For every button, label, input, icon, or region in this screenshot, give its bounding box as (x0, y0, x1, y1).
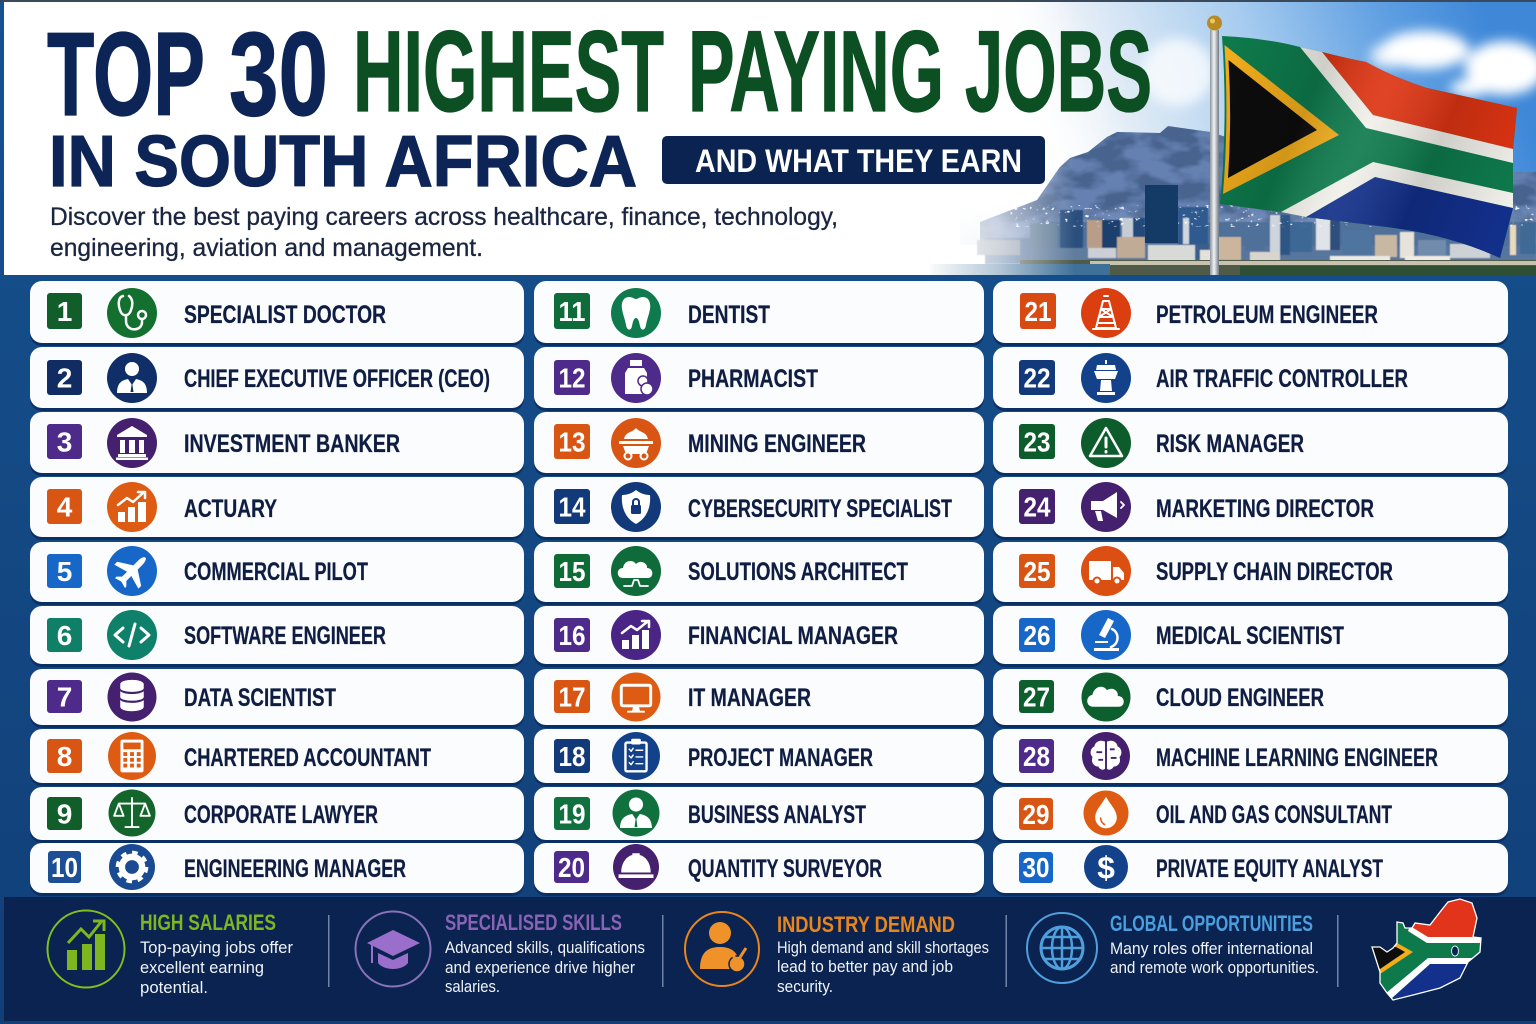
icon: finance chart (611, 610, 661, 660)
icon: hard hat (613, 844, 659, 890)
icon: medicine bottle (611, 353, 661, 403)
badge 25: 25 (1024, 556, 1050, 587)
description (777, 938, 989, 996)
badge 6 (47, 618, 82, 652)
row 26 (993, 606, 1508, 667)
badge 12: 12 (558, 362, 586, 394)
badge 16: 16 (558, 620, 586, 651)
footer band (4, 895, 1536, 1021)
badge 30: 30 (1022, 852, 1050, 883)
row 22 (993, 347, 1508, 411)
badge 8: 8 (57, 741, 72, 772)
row 18 (534, 729, 984, 786)
label: OIL AND GAS CONSULTANT (1156, 801, 1392, 829)
icon: growth chart (107, 482, 157, 532)
benefit: global opportunities (1027, 911, 1319, 983)
benefit: specialised skills (356, 910, 645, 996)
heading: SPECIALISED SKILLS (445, 910, 622, 935)
badge 24: 24 (1024, 492, 1051, 522)
label: MINING ENGINEER (688, 430, 866, 458)
row 30 (993, 843, 1508, 896)
icon: scales (108, 790, 156, 836)
heading: INDUSTRY DEMAND (777, 912, 955, 937)
badge 2: 2 (57, 362, 72, 394)
badge 27: 27 (1023, 682, 1050, 712)
label: PHARMACIST (688, 365, 818, 393)
benefit: industry demand (685, 912, 989, 996)
badge 18: 18 (558, 741, 586, 772)
title: HIGHEST PAYING JOBS: PAYING (688, 8, 944, 136)
label: PRIVATE EQUITY ANALYST (1156, 855, 1383, 883)
title: HIGHEST PAYING JOBS (353, 8, 1152, 136)
row 14 (534, 477, 984, 540)
icon: airplane (107, 546, 157, 596)
row 3 (30, 412, 524, 476)
badge 5: 5 (57, 556, 72, 587)
badge 1 (47, 293, 82, 329)
description: Top-paying jobs offer (140, 938, 293, 957)
flag pole (1207, 16, 1222, 275)
label: QUANTITY SURVEYOR (688, 855, 882, 883)
icon: dollar (1084, 845, 1128, 889)
badge 15: 15 (558, 556, 586, 587)
row 8 (30, 729, 524, 786)
row 19 (534, 787, 984, 843)
badge 9: 9 (57, 798, 72, 830)
label: PETROLEUM ENGINEER (1156, 301, 1378, 329)
description: security. (777, 977, 833, 996)
icon: calculator (108, 732, 156, 780)
badge 21: 21 (1024, 296, 1052, 327)
intro text (50, 203, 838, 262)
badge 1: 1 (57, 296, 72, 327)
row 4 (30, 477, 524, 540)
benefit: high salaries (48, 910, 293, 997)
row 17 (534, 669, 984, 728)
header banner (4, 2, 1536, 275)
South African flag (1220, 36, 1517, 258)
row 21 (993, 281, 1508, 346)
job list: column 2 (534, 281, 984, 896)
badge 20: 20 (558, 852, 585, 883)
icon: business person (612, 790, 660, 836)
badge 28: 28 (1023, 741, 1050, 772)
label: DENTIST (688, 301, 770, 329)
label: SOFTWARE ENGINEER (184, 622, 386, 650)
badge 7 (47, 680, 82, 713)
icon: oil rig (1081, 288, 1131, 338)
icon: control tower (1081, 353, 1131, 403)
icon: shield lock (611, 482, 661, 532)
row 11 (534, 281, 984, 346)
badge 9 (47, 797, 82, 830)
icon: delivery truck (1081, 546, 1131, 596)
label: PROJECT MANAGER (688, 744, 873, 772)
icon: graduation cap (356, 912, 430, 986)
badge 4 (47, 489, 82, 524)
icon: microscope (1081, 610, 1131, 660)
row 1 (30, 281, 524, 346)
intro text: Discover the best paying careers across healthcare, finance, technology, (50, 203, 838, 231)
label: AIR TRAFFIC CONTROLLER (1156, 365, 1408, 393)
icon: database (108, 672, 156, 722)
label: MARKETING DIRECTOR (1156, 495, 1374, 523)
title: HIGHEST PAYING JOBS: JOBS (965, 8, 1152, 136)
badge 26: 26 (1024, 620, 1050, 651)
badge 29: 29 (1022, 799, 1050, 830)
Table Mountain (980, 126, 1536, 250)
row 15 (534, 542, 984, 605)
row 27 (993, 669, 1508, 728)
description: Advanced skills, qualifications (445, 938, 645, 957)
label: CHIEF EXECUTIVE OFFICER (CEO) (184, 365, 490, 393)
description: and remote work opportunities. (1110, 958, 1319, 977)
badge 11: 11 (558, 296, 586, 327)
subtitle pill (662, 136, 1045, 184)
intro text: engineering, aviation and management. (50, 234, 483, 262)
icon: mine cart (611, 418, 661, 468)
title line 1 (47, 8, 1152, 141)
row 23 (993, 412, 1508, 476)
description: excellent earning (140, 958, 264, 977)
label: SOLUTIONS ARCHITECT (688, 558, 908, 586)
icon: warning (1081, 418, 1131, 468)
row 29 (993, 787, 1508, 843)
title line 2: IN SOUTH AFRICA: IN SOUTH AFRICA (49, 122, 637, 202)
badge 13: 13 (558, 426, 586, 458)
label: FINANCIAL MANAGER (688, 622, 898, 650)
row 12 (534, 347, 984, 411)
label: SPECIALIST DOCTOR (184, 301, 386, 329)
icon: clipboard (612, 732, 660, 780)
title: TOP 30: TOP (47, 8, 205, 141)
badge 3 (47, 424, 82, 459)
icon: bank (107, 418, 157, 468)
job list: column 3 (993, 281, 1508, 896)
icon: brain (1082, 732, 1130, 780)
label: DATA SCIENTIST (184, 684, 336, 712)
description: and experience drive higher (445, 958, 635, 977)
icon: worker with tools (685, 912, 759, 986)
badge 3: 3 (57, 426, 72, 458)
row 6 (30, 606, 524, 667)
badge 6: 6 (57, 620, 72, 651)
description (140, 938, 293, 997)
row 28 (993, 729, 1508, 786)
row 10 (30, 843, 524, 896)
label: SUPPLY CHAIN DIRECTOR (1156, 558, 1393, 586)
badge 5 (47, 554, 82, 588)
description: Many roles offer international (1110, 939, 1313, 958)
label: ACTUARY (184, 495, 277, 523)
badge 22: 22 (1024, 362, 1050, 394)
skyline photo: sky, Table Mountain and city (925, 2, 1536, 275)
icon: rising bars (48, 910, 124, 988)
row 13 (534, 412, 984, 476)
description (445, 938, 645, 996)
heading: GLOBAL OPPORTUNITIES (1110, 911, 1313, 936)
row 7 (30, 669, 524, 728)
row 2 (30, 347, 524, 411)
label: IT MANAGER (688, 684, 811, 712)
label: MACHINE LEARNING ENGINEER (1156, 744, 1438, 772)
label: COMMERCIAL PILOT (184, 558, 368, 586)
label: CORPORATE LAWYER (184, 801, 378, 829)
title: HIGHEST PAYING JOBS: HIGHEST (353, 8, 664, 136)
badge 2 (47, 360, 82, 395)
label: RISK MANAGER (1156, 430, 1304, 458)
description: High demand and skill shortages (777, 938, 989, 957)
description: potential. (140, 978, 208, 997)
icon: tooth (611, 288, 661, 338)
icon: gear (109, 844, 155, 890)
job list: column 1 (30, 281, 524, 896)
badge 19: 19 (558, 798, 586, 830)
icon: cloud network (611, 546, 661, 596)
label: MEDICAL SCIENTIST (1156, 622, 1344, 650)
badge 7: 7 (57, 682, 72, 712)
row 20 (534, 843, 984, 896)
title: TOP 30: 30 (229, 8, 328, 141)
label: CHARTERED ACCOUNTANT (184, 744, 431, 772)
badge 14: 14 (558, 492, 586, 522)
row 16 (534, 606, 984, 667)
description (1110, 939, 1319, 977)
icon: code (107, 610, 157, 660)
icon: executive (107, 353, 157, 403)
row 25 (993, 542, 1508, 605)
label: ENGINEERING MANAGER (184, 855, 406, 883)
heading: HIGH SALARIES (140, 910, 276, 935)
badge 4: 4 (57, 492, 73, 522)
badge 10: 10 (51, 852, 78, 883)
row 24 (993, 477, 1508, 540)
icon: stethoscope (107, 288, 157, 338)
badge 23: 23 (1024, 426, 1050, 458)
label: BUSINESS ANALYST (688, 801, 866, 829)
label: INVESTMENT BANKER (184, 430, 400, 458)
icon: dollar: $ (1097, 849, 1115, 885)
row 9 (30, 787, 524, 843)
label: CYBERSECURITY SPECIALIST (688, 495, 952, 523)
icon: cloud (1082, 672, 1130, 722)
description: lead to better pay and job (777, 957, 953, 976)
icon: globe (1027, 913, 1097, 983)
description: salaries. (445, 977, 500, 996)
icon: megaphone (1081, 482, 1131, 532)
badge 17: 17 (558, 682, 586, 712)
icon: oil drop (1084, 790, 1128, 836)
subtitle pill: AND WHAT THEY EARN (695, 143, 1022, 179)
icon: monitor (612, 672, 660, 722)
South Africa flag map (1371, 898, 1482, 1001)
label: CLOUD ENGINEER (1156, 684, 1324, 712)
badge 8 (47, 739, 82, 773)
row 5 (30, 542, 524, 605)
